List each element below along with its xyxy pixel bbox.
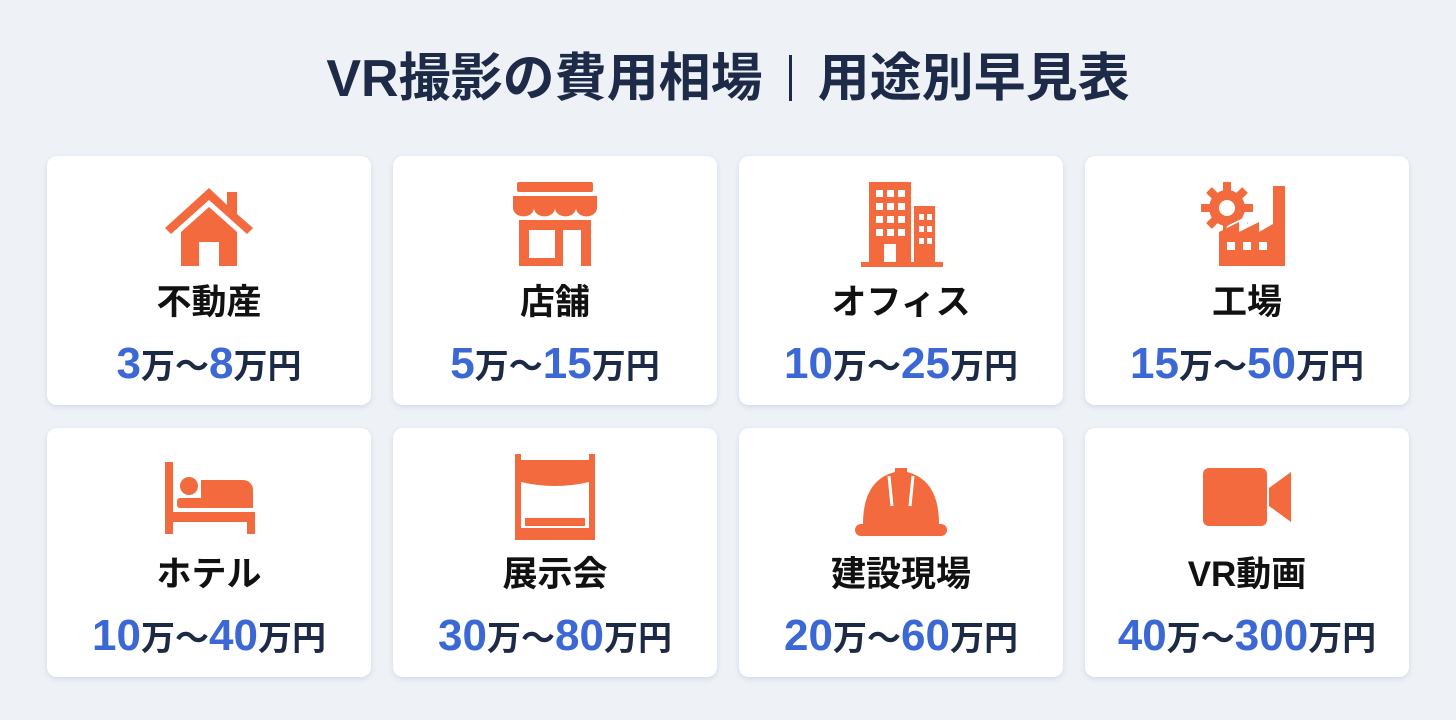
icon: bed (165, 462, 255, 534)
card: オフィス (739, 156, 1063, 405)
price: 10万～40万円 (92, 611, 326, 660)
price: 10万～25万円 (784, 339, 1018, 388)
card: 工場 (1085, 156, 1409, 405)
card: 不動産 (47, 156, 371, 405)
label: 展示会 (502, 555, 608, 594)
price: 40万～300万円 (1118, 611, 1376, 660)
label: 不動産 (156, 283, 262, 322)
icon: factory with gear (1201, 182, 1285, 266)
label: 工場 (1212, 283, 1282, 322)
price: 15万～50万円 (1130, 339, 1364, 388)
icon: video camera (1203, 468, 1291, 526)
icon: shop (513, 182, 597, 266)
label: VR動画 (1188, 555, 1306, 594)
label: 建設現場 (831, 555, 971, 594)
card: 展示会 (393, 428, 717, 677)
card: VR動画 (1085, 428, 1409, 677)
icon: exhibition booth (515, 454, 595, 540)
title: VR撮影の費用相場 用途別早見表 (326, 50, 1130, 108)
card: ホテル (47, 428, 371, 677)
price: 5万～15万円 (450, 339, 660, 388)
icon: office building (861, 182, 943, 267)
price: 30万～80万円 (438, 611, 672, 660)
icon: house (165, 188, 253, 266)
price: 20万～60万円 (784, 611, 1018, 660)
card: 店舗 (393, 156, 717, 405)
card: 建設現場 (739, 428, 1063, 677)
price: 3万～8万円 (117, 339, 301, 388)
label: ホテル (156, 555, 262, 594)
icon: hard hat (855, 468, 947, 536)
label: 店舗 (520, 283, 590, 322)
label: オフィス (831, 283, 971, 322)
